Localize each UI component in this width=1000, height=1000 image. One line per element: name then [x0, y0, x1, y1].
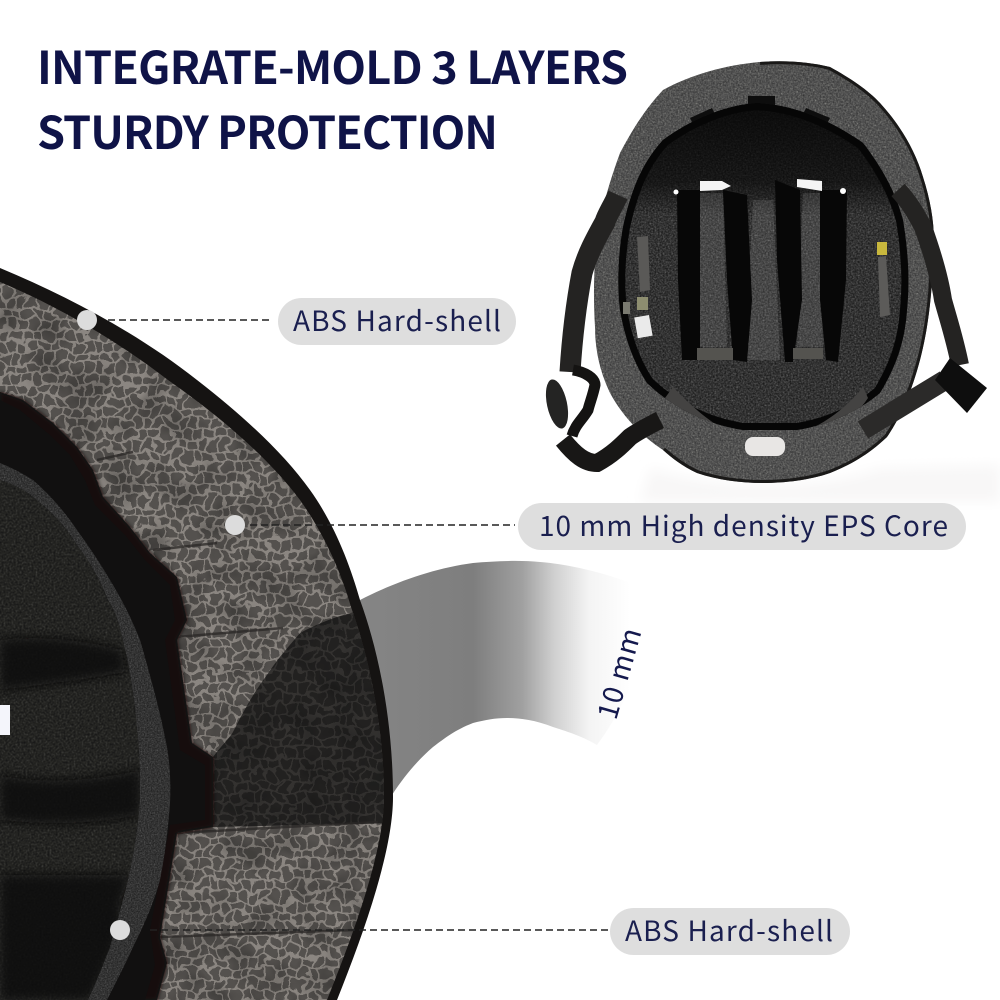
inner cavity	[618, 104, 908, 430]
outer ABS shell rim	[0, 268, 393, 1000]
right buckle	[935, 358, 987, 413]
EPS foam layer	[0, 282, 384, 1000]
10 mm dimension label: 10 mm	[586, 623, 650, 723]
cavity edge fill	[0, 400, 205, 1000]
title: INTEGRATE-MOLD 3 LAYERS	[37, 32, 628, 97]
right strap	[898, 190, 960, 365]
dark vent channels	[677, 180, 847, 362]
rear band	[665, 388, 868, 426]
liner interior	[0, 470, 145, 1000]
left strap	[570, 195, 618, 372]
dark cavity between foam and liner	[0, 392, 213, 1000]
white strips	[700, 179, 822, 191]
helmet shell	[590, 60, 940, 490]
white reflective strip	[0, 705, 10, 735]
yellow label	[877, 242, 887, 255]
EU label	[634, 315, 653, 338]
label pill 2: 10 mm High density EPS Core	[539, 505, 948, 545]
enlarged helmet cross-section	[0, 240, 420, 1000]
callout lines	[108, 320, 608, 930]
upper dark shading	[632, 104, 891, 209]
padded liner ring	[0, 460, 180, 1000]
title: STURDY PROTECTION	[37, 97, 498, 162]
interior dark bands	[0, 638, 140, 1000]
small helmet photo	[542, 60, 1000, 502]
inner ring edge	[618, 103, 908, 430]
title	[37, 32, 628, 162]
left buckle	[542, 377, 572, 431]
label pill 3: ABS Hard-shell	[625, 910, 833, 950]
darkened foam in gradient band	[213, 612, 384, 827]
outer dark edge	[663, 61, 934, 483]
foam seams	[97, 452, 378, 937]
left adjuster loop	[572, 370, 595, 436]
label pill 1: ABS Hard-shell	[293, 300, 501, 340]
floor reflection	[640, 465, 1000, 502]
10 mm thickness gradient arc	[360, 561, 646, 795]
rear light	[745, 437, 785, 456]
callout dots	[77, 310, 245, 940]
left lower strap	[563, 420, 660, 463]
top foam notches	[690, 96, 830, 122]
gray tabs	[697, 348, 733, 360]
foam strip highlights	[697, 193, 823, 360]
left labels	[637, 236, 650, 292]
